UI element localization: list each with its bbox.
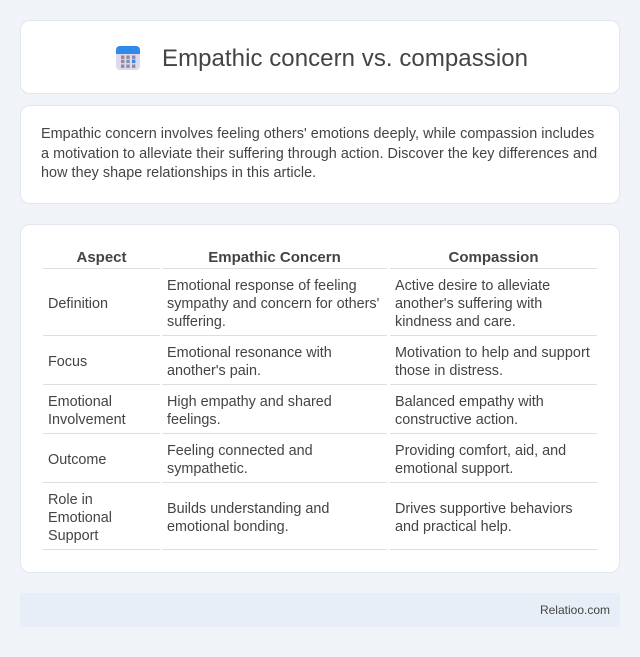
row: Role in Emotional Support: Drives supportive behaviors — [395, 501, 573, 517]
row: Emotional Involvement: Emotional — [48, 394, 112, 410]
row: Definition: kindness and care. — [395, 314, 516, 330]
header panel — [20, 20, 620, 94]
row: Outcome: emotional support. — [395, 461, 513, 477]
table header row — [43, 249, 597, 269]
row: Definition: Definition — [48, 296, 108, 312]
row: Emotional Involvement: constructive action. — [395, 412, 518, 428]
row: Definition: Active desire to alleviate — [395, 278, 550, 294]
row: Role in Emotional Support — [43, 492, 597, 550]
row: Definition: another's suffering with — [395, 296, 542, 312]
intro text: a motivation to alleviate their suffering through action. Discover the key differences and — [41, 146, 597, 162]
row: Role in Emotional Support: emotional bonding. — [167, 519, 289, 535]
row: Emotional Involvement: Involvement — [48, 412, 126, 428]
row: Emotional Involvement: feelings. — [167, 412, 221, 428]
row: Emotional Involvement: Balanced empathy with — [395, 394, 544, 410]
row: Outcome: Outcome — [48, 452, 106, 468]
footer bar — [20, 593, 620, 627]
row: Outcome — [43, 443, 597, 483]
intro panel — [20, 105, 620, 204]
intro text: how they shape relationships in this article. — [41, 165, 316, 181]
intro text — [41, 126, 597, 181]
row: Focus: Focus — [48, 354, 87, 370]
row: Focus: Motivation to help and support — [395, 345, 590, 361]
title: Empathic concern vs. compassion — [162, 45, 528, 72]
table header row: Compassion — [448, 249, 538, 266]
row: Outcome: Feeling connected and — [167, 443, 313, 459]
row: Emotional Involvement: High empathy and shared — [167, 394, 332, 410]
row: Emotional Involvement — [43, 394, 597, 434]
table panel — [20, 224, 620, 573]
comparison table — [43, 249, 597, 550]
row: Definition — [43, 278, 597, 336]
row: Outcome: Providing comfort, aid, and — [395, 443, 566, 459]
row: Definition: Emotional response of feeling — [167, 278, 357, 294]
table header row: Aspect — [76, 249, 127, 266]
row: Definition: suffering. — [167, 314, 226, 330]
row: Focus: Emotional resonance with — [167, 345, 332, 361]
row: Role in Emotional Support: and practical help. — [395, 519, 512, 535]
row: Role in Emotional Support: Builds understanding and — [167, 501, 329, 517]
row: Role in Emotional Support: Support — [48, 528, 98, 544]
intro text: Empathic concern involves feeling others' emotions deeply, while compassion includes — [41, 126, 594, 142]
row: Role in Emotional Support: Role in — [48, 492, 93, 508]
row: Focus — [43, 345, 597, 385]
icon: calendar — [116, 46, 140, 70]
footer credit: Relatioo.com — [540, 603, 610, 617]
row: Focus: those in distress. — [395, 363, 503, 379]
table header row: Empathic Concern — [208, 249, 341, 266]
row: Focus: another's pain. — [167, 363, 261, 379]
row: Role in Emotional Support: Emotional — [48, 510, 112, 526]
row: Definition: sympathy and concern for others' — [167, 296, 379, 312]
row: Outcome: sympathetic. — [167, 461, 248, 477]
